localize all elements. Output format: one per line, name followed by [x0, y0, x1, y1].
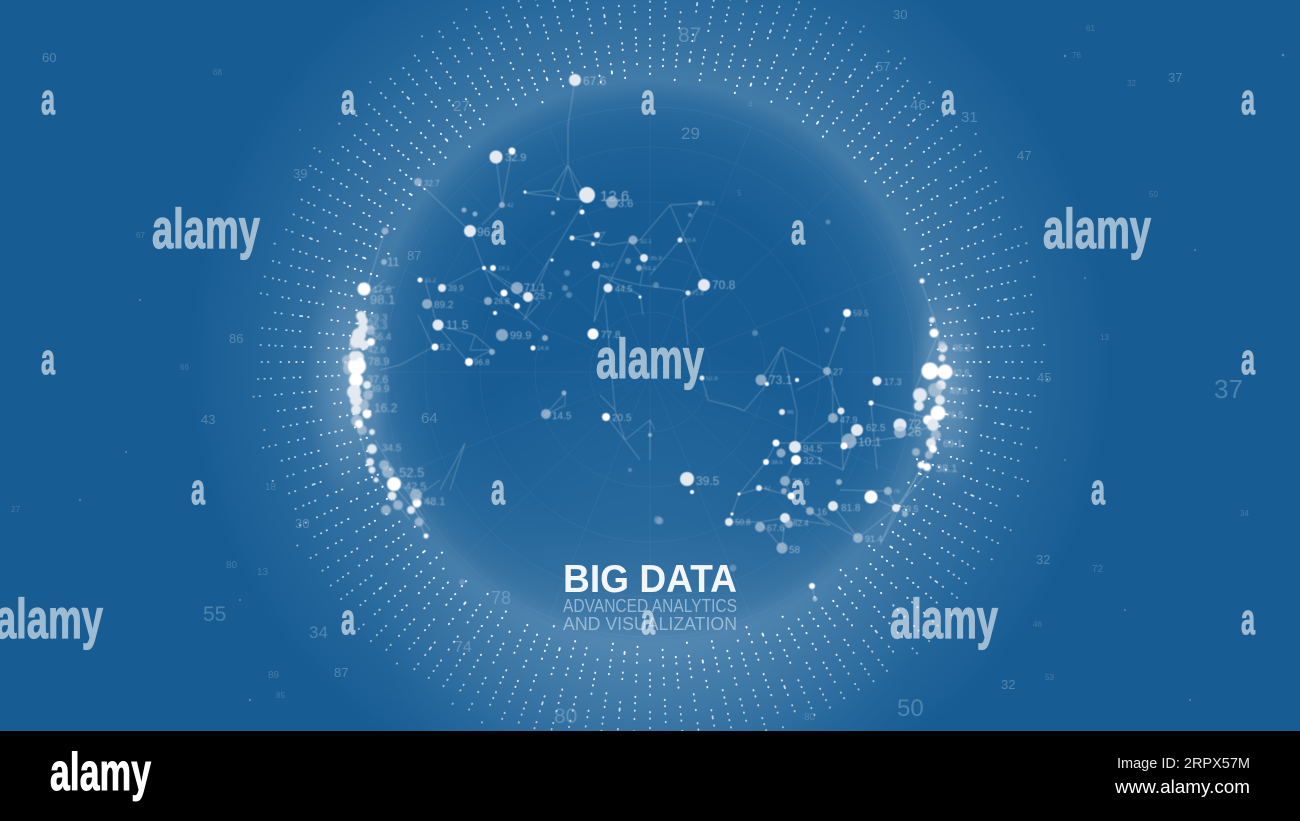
network nodes: centre: 77.8	[601, 330, 621, 341]
right edge data cluster: 38.1	[936, 463, 957, 475]
faint scattered numbers: 29	[681, 124, 700, 143]
faint scattered numbers: 57	[876, 59, 890, 74]
network nodes: centre: 70.8	[712, 278, 736, 292]
faint scattered numbers: 34	[1240, 509, 1249, 518]
network nodes: centre: 25.7	[602, 263, 614, 269]
faint scattered numbers: 67	[136, 231, 145, 240]
small watermark letters: a	[41, 75, 55, 124]
left edge data cluster: 35.3	[368, 321, 388, 332]
network nodes: upper left: 19.1	[498, 266, 510, 272]
faint scattered numbers: 5	[737, 189, 742, 198]
faint scattered numbers: 89	[268, 670, 280, 681]
faint scattered numbers: 46	[910, 97, 927, 114]
faint scattered numbers: 87	[334, 665, 348, 680]
faint scattered numbers: 4	[748, 100, 753, 109]
network nodes: lower right: 72	[908, 417, 922, 431]
network nodes: centre: 14.5	[552, 411, 572, 422]
large watermarks: alamy	[1043, 197, 1151, 260]
small watermark letters: a	[941, 75, 955, 124]
network nodes: lower right: 76	[893, 489, 900, 495]
faint scattered numbers: 64	[421, 410, 438, 427]
large watermarks: alamy	[152, 197, 260, 260]
network nodes: centre: 32.1	[640, 239, 652, 245]
network nodes: lower right: 26.6	[792, 477, 810, 487]
network nodes: upper left: 39.9	[448, 284, 464, 293]
right edge data cluster: 95.2	[953, 343, 971, 353]
small watermark letters: a	[191, 465, 205, 514]
faint scattered numbers: 53	[1045, 673, 1054, 682]
small watermark letters: a	[791, 465, 805, 514]
left edge data cluster: 98.1	[370, 292, 395, 307]
faint scattered numbers: 60	[42, 50, 56, 65]
faint scattered numbers: 27	[11, 505, 20, 514]
faint scattered numbers: 74	[454, 639, 472, 656]
small watermark letters: a	[491, 205, 505, 254]
network nodes: lower right: 39.5	[696, 474, 720, 488]
network nodes: lower right	[656, 309, 922, 602]
network nodes: lower right: 73.1	[769, 373, 793, 387]
image id: Image ID: 2RPX57M	[1117, 755, 1250, 772]
faint scattered numbers: 46	[1033, 620, 1042, 629]
faint scattered numbers: 43	[201, 412, 215, 427]
footer logo: alamy	[50, 743, 151, 802]
network nodes: centre: 3.6	[618, 198, 633, 210]
small watermark letters: a	[341, 595, 355, 644]
faint scattered numbers: 72	[1092, 564, 1104, 575]
faint scattered numbers: 76	[1072, 51, 1081, 60]
right edge data cluster: 49.6	[950, 386, 968, 396]
watermarks	[0, 75, 1255, 650]
network nodes: upper left: 25.7	[535, 291, 553, 301]
faint scattered numbers: 78	[491, 588, 511, 608]
faint scattered numbers: 61	[1086, 24, 1095, 33]
right edge data cluster: 76.5	[946, 410, 964, 420]
faint scattered numbers: 80	[226, 560, 238, 571]
network nodes: lower right: 96	[787, 410, 794, 416]
network nodes: centre: 20.5	[612, 413, 632, 424]
network nodes: upper left: 14.8	[537, 346, 549, 352]
left edge data cluster: 37.6	[367, 374, 388, 386]
left edge data cluster: 52.5	[399, 465, 424, 480]
small watermark letters: a	[1091, 465, 1105, 514]
network nodes: lower right: 62.5	[866, 423, 886, 434]
network nodes: lower right: 16	[817, 507, 827, 517]
title block	[563, 565, 736, 630]
network nodes: upper left: 42	[507, 203, 514, 209]
subtitle line 2: AND VISUALIZATION	[563, 614, 737, 634]
network nodes: upper left	[381, 74, 607, 367]
network nodes: centre: 52.8	[706, 376, 718, 382]
left edge data cluster: 16.2	[374, 401, 398, 415]
network nodes: lower right: 27	[833, 367, 843, 377]
website: www.alamy.com	[1114, 777, 1250, 797]
faint scattered numbers: 50	[1149, 190, 1158, 199]
faint scattered numbers: 66	[180, 363, 189, 372]
network nodes: lower right: 94.5	[803, 444, 823, 455]
faint scattered numbers: 39	[293, 166, 307, 181]
network nodes: upper left: 67.6	[583, 74, 607, 88]
large watermarks: alamy	[890, 587, 998, 650]
glowing halo ring	[238, 0, 1062, 731]
network nodes: lower right: 42	[764, 486, 771, 492]
title: BIG DATA: BIG DATA	[563, 558, 737, 601]
network connection lines	[350, 80, 945, 600]
left edge data cluster: 78.9	[368, 356, 389, 368]
network nodes: lower right: 58	[789, 545, 801, 556]
network nodes: centre: 44.5	[615, 284, 633, 294]
large watermarks	[0, 197, 1151, 650]
left edge data cluster: 29.3	[368, 313, 388, 324]
footer bar	[0, 731, 1300, 821]
small scattered background dots	[79, 54, 1284, 701]
left edge data cluster: 42.5	[405, 481, 426, 493]
network nodes: upper left: 71.1	[524, 282, 545, 294]
faint scattered numbers: 37	[1168, 70, 1182, 85]
subtitle line 1: ADVANCED ANALYTICS	[563, 596, 737, 616]
network nodes: lower right: 47.9	[840, 415, 858, 425]
network nodes: upper left: 26.8	[494, 297, 510, 306]
faint scattered numbers: 85	[276, 691, 285, 700]
faint scattered numbers: 13	[257, 567, 269, 578]
left edge data cluster: 34.5	[382, 443, 402, 454]
right edge data cluster	[912, 278, 971, 475]
network nodes: lower right: 29.5	[901, 504, 919, 514]
network nodes: lower right: 91.4	[865, 534, 883, 544]
small watermark letters: a	[1241, 335, 1255, 384]
left edge data cluster: 56.4	[372, 332, 392, 343]
network nodes: centre: 96.2	[703, 201, 715, 207]
faint scattered numbers: 47	[1017, 148, 1031, 163]
network nodes: centre: 12.6	[600, 188, 629, 205]
faint scattered numbers: 87	[407, 248, 421, 263]
faint scattered numbers: 80	[804, 712, 816, 723]
faint scattered numbers: 32	[1036, 552, 1050, 567]
network nodes: upper left: 32.9	[505, 152, 526, 164]
left edge data cluster: 42.6	[368, 345, 386, 355]
faint scattered numbers: 55	[203, 603, 226, 626]
network nodes: upper left: 5.2	[440, 343, 452, 352]
faint scattered numbers: 37	[1214, 374, 1243, 404]
network nodes: lower right: 50.8	[735, 518, 751, 527]
right edge data cluster: 42.5	[952, 368, 970, 378]
faint scattered numbers: 87	[678, 24, 701, 47]
faint scattered numbers: 50	[897, 695, 924, 722]
faint scattered numbers: 86	[229, 331, 243, 346]
faint scattered numbers: 13	[1100, 333, 1109, 342]
small watermark letters: a	[1241, 595, 1255, 644]
network nodes: lower right: 32.1	[803, 456, 823, 467]
small watermark letters: a	[791, 205, 805, 254]
radial dotted rays	[252, 0, 1048, 731]
small watermark letters	[41, 75, 1255, 644]
faint scattered numbers: 68	[213, 68, 222, 77]
network nodes: centre: 72.8	[692, 291, 704, 297]
network nodes: centre: 35.3	[650, 256, 662, 262]
faint scattered numbers: 18	[265, 482, 277, 493]
network nodes: upper left: 11.2	[425, 278, 437, 284]
network nodes: lower right: 10.1	[858, 435, 882, 449]
network nodes: lower right: 38.5	[771, 460, 783, 466]
small watermark letters: a	[491, 465, 505, 514]
network nodes: lower right: 26	[908, 425, 922, 439]
network nodes: upper left: 96.8	[474, 358, 490, 367]
faint scattered numbers: 45	[1037, 370, 1051, 385]
network nodes: upper left: 11	[387, 255, 400, 269]
network nodes: lower right: 82.4	[793, 519, 809, 528]
network nodes: centre: 10.4	[684, 238, 696, 244]
left edge data cluster: 48.1	[424, 496, 445, 508]
left edge data cluster: 39.9	[370, 384, 390, 395]
large watermarks: alamy	[596, 327, 704, 390]
small watermark letters: a	[1241, 75, 1255, 124]
network nodes: upper left: 32.7	[424, 179, 440, 188]
network nodes: upper left: 99.9	[510, 330, 531, 342]
faint scattered numbers: 32	[1127, 79, 1136, 88]
small watermark letters: a	[641, 595, 655, 644]
network nodes: upper left: 11.5	[446, 318, 469, 332]
faint scattered numbers: 34	[309, 623, 328, 642]
faint scattered numbers: 30	[295, 516, 309, 531]
network nodes: centre: 63.2	[644, 266, 656, 272]
network nodes: lower right: 81.8	[841, 503, 861, 514]
faint scattered numbers: 31	[961, 109, 978, 126]
left edge data cluster	[342, 282, 445, 538]
faint scattered numbers: 80	[554, 705, 577, 728]
faint scattered numbers: 27	[453, 98, 470, 115]
right edge data cluster: 69.1	[943, 439, 963, 450]
small watermark letters: a	[41, 335, 55, 384]
faint scattered numbers: 32	[1001, 677, 1015, 692]
small watermark letters: a	[641, 75, 655, 124]
network nodes: upper left: 96.2	[477, 225, 501, 239]
left edge data cluster: 47.6	[372, 285, 392, 296]
small watermark letters: a	[341, 75, 355, 124]
network nodes: lower right: 67.6	[767, 523, 785, 533]
network nodes: upper left: 89.2	[434, 300, 454, 311]
polar grid inside sphere	[385, 107, 915, 637]
network nodes: lower right: 17.3	[884, 377, 902, 387]
network nodes: centre	[459, 187, 830, 585]
faint scattered numbers: 30	[893, 7, 907, 22]
network nodes: lower right: 59.5	[853, 309, 869, 318]
